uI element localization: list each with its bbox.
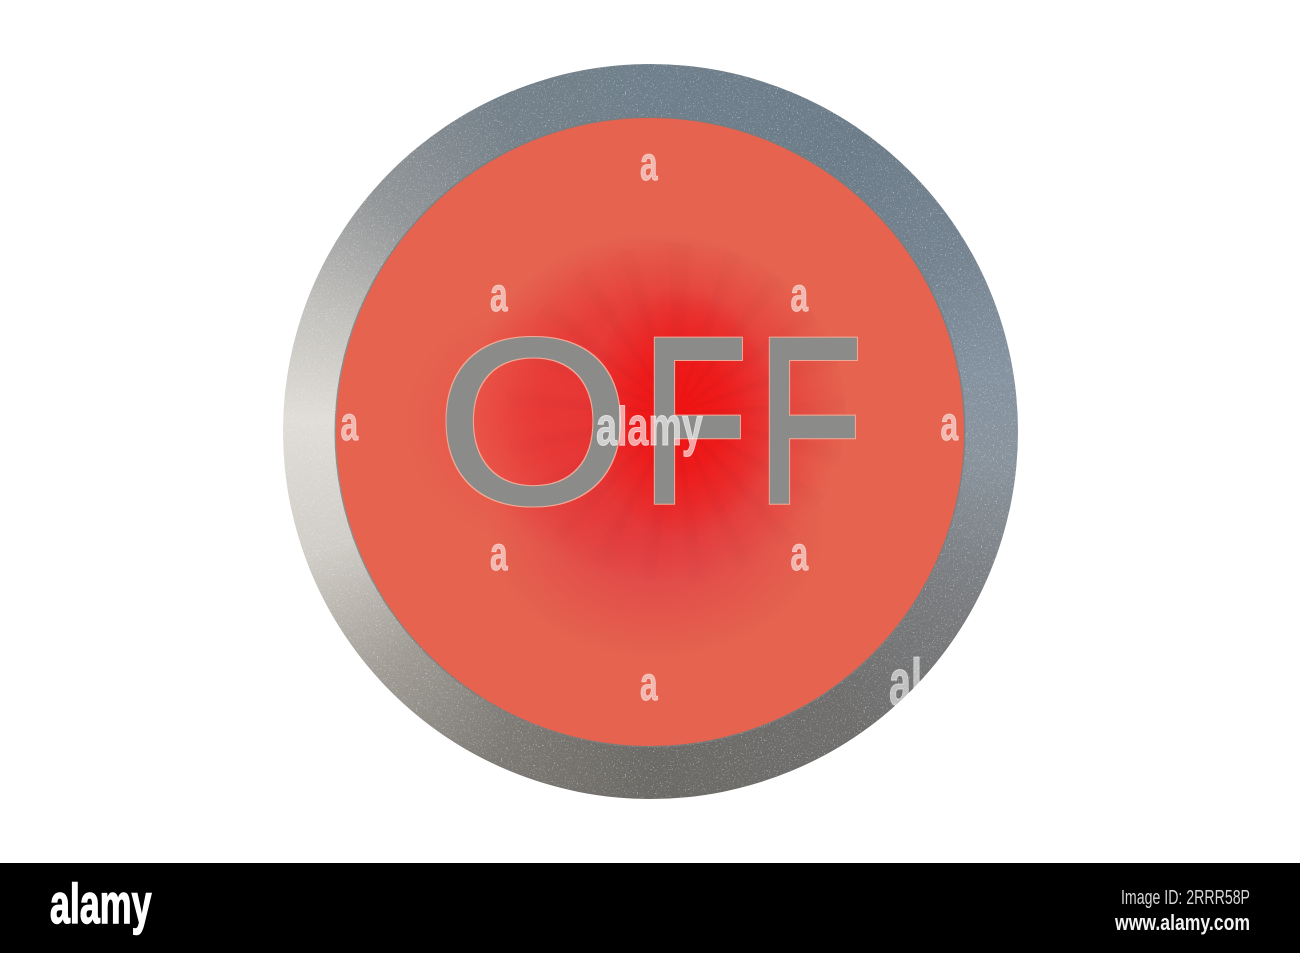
footer bar: [0, 863, 1300, 953]
footer logo: alamy: [50, 872, 152, 935]
button: [283, 64, 1018, 799]
watermark marks: a: [490, 267, 508, 322]
lower-right watermark: al: [889, 646, 922, 720]
watermark marks: a: [340, 396, 358, 451]
watermark marks: a: [640, 136, 658, 191]
OFF lettering: [436, 289, 862, 553]
watermark marks: a: [790, 526, 808, 581]
watermark marks: a: [940, 396, 958, 451]
OFF lettering: F: [757, 289, 862, 552]
watermark marks: a: [640, 656, 658, 711]
light rays: [506, 243, 846, 583]
OFF lettering: F: [642, 289, 747, 552]
watermark marks: a: [790, 267, 808, 322]
button lettering and watermarks: [284, 64, 1018, 798]
watermark marks: a: [490, 526, 508, 581]
OFF lettering: O: [436, 289, 631, 553]
center watermark: alamy: [596, 395, 703, 457]
image id: Image ID: 2RRR58P: [1121, 887, 1250, 909]
red lit disk: [336, 118, 964, 746]
website: www.alamy.com: [1114, 910, 1250, 935]
metal speckle: [280, 60, 1020, 802]
watermark marks: [340, 136, 958, 711]
metal ring: [283, 64, 1018, 799]
